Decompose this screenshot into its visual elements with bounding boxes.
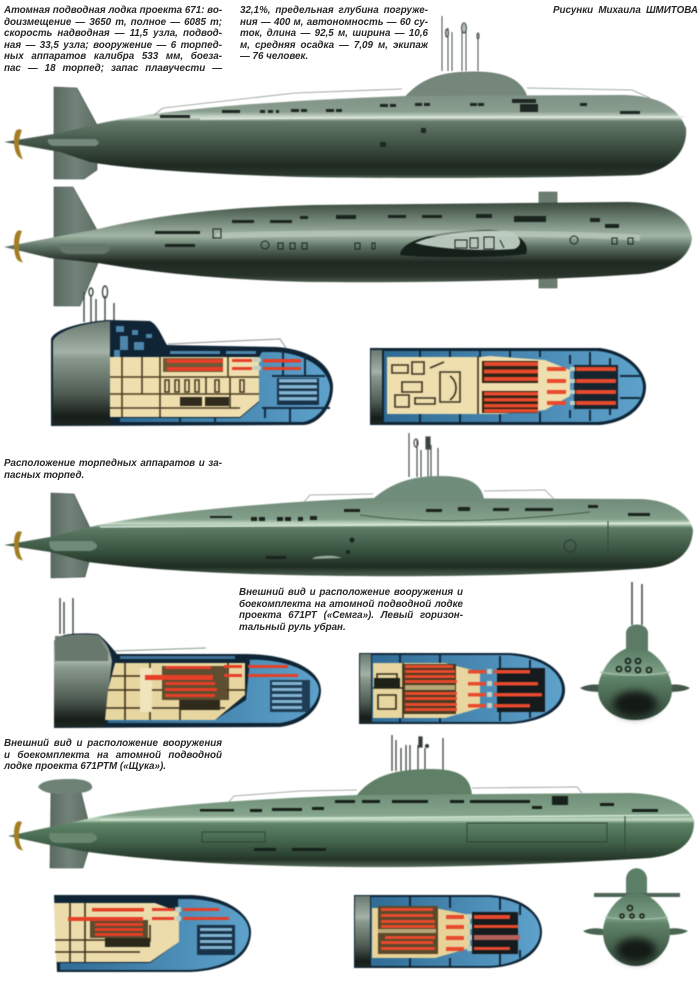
cutaway 671RT plan [359,653,565,724]
text: project 671 specs, right column: 32,1%, предельная глубина погруже- [240,5,428,16]
caption: project 671RTM [4,738,222,772]
text: project 671 specs, left column: ная — 33,5 узла; вооружение — 6 торпед- [4,40,222,51]
text: project 671 specs, right column [240,5,428,62]
text: project 671 specs, left column: пас — 18 торпед; запас плавучести — [4,63,222,74]
caption: project 671RTM: лодке проекта 671РТМ («Щука»). [4,761,166,772]
caption: project 671RTM: Внешний вид и расположение вооружения [4,738,222,749]
caption: project 671RT [239,587,463,633]
cutaway 671 side [51,286,333,426]
text: project 671 specs, left column: Атомная подводная лодка проекта 671: во- [4,5,222,16]
text: project 671 specs, right column: м, средняя осадка — 7,09 м, экипаж [240,40,428,51]
submarine 671 top view [4,187,692,306]
submarine 671RT side view [4,433,693,578]
caption: torpedo layout [4,458,222,481]
submarine 671RTM side view [8,735,694,868]
submarine 671 side view [4,16,686,179]
cutaway 671RT side [54,598,321,728]
text: project 671 specs, right column: — 76 человек. [240,51,308,62]
text: project 671 specs, left column: доизмещение — 3650 т, полное — 6085 т; [4,17,222,28]
caption: project 671RT: проекта 671РТ («Семга»). Левый горизон- [239,610,463,621]
text: project 671 specs, left column: скорость надводная — 11,5 узла, подвод- [4,28,222,39]
cutaway 671 plan [370,348,646,425]
text: project 671 specs, left column: ных аппаратов калибра 533 мм, боеза- [4,51,222,62]
text: project 671 specs, right column: ток, длина — 92,5 м, ширина — 10,6 [240,28,428,39]
illustration credit: Рисунки Михаила ШМИТОВА [553,5,698,16]
text: project 671 specs, right column: ния — 400 м, автономность — 60 су- [240,17,428,28]
text: project 671 specs, left column [4,5,222,74]
front view 671RTM [583,868,688,966]
cutaway 671RTM side [54,895,251,972]
caption: project 671RT: боекомплекта на атомной подводной лодке [239,599,463,610]
cutaway 671RTM plan [354,895,542,968]
front view 671RT [580,582,690,720]
caption: torpedo layout: Расположение торпедных аппаратов и за- [4,458,222,469]
caption: project 671RT: тальный руль убран. [239,622,346,633]
caption: project 671RTM: и боекомплекта на атомной подводной [4,750,222,761]
caption: project 671RT: Внешний вид и расположение вооружения и [239,587,463,598]
caption: torpedo layout: пасных торпед. [4,470,84,481]
